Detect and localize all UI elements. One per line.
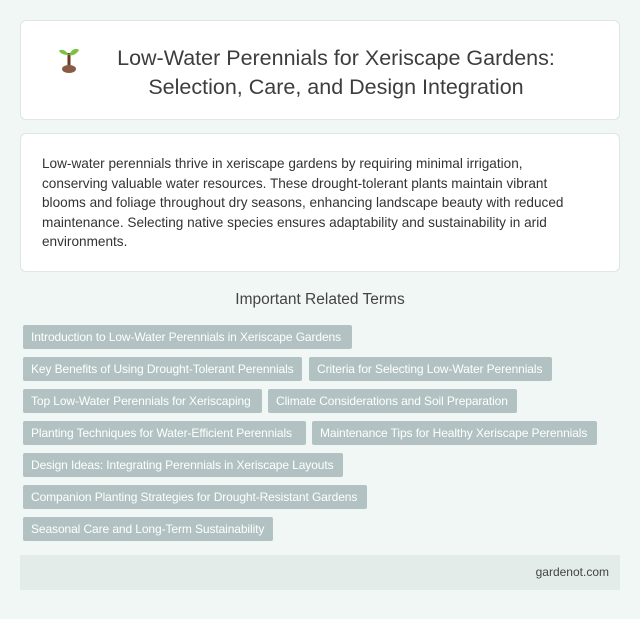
icon: seedling (59, 48, 79, 73)
tag 5 (268, 389, 517, 413)
tag 5: Climate Considerations and Soil Preparation (276, 394, 508, 408)
tag 3 (309, 357, 552, 381)
tag 6 (23, 421, 306, 445)
tag 9: Companion Planting Strategies for Drought-Resistant Gardens (31, 490, 357, 504)
description card (20, 133, 620, 272)
tag 2 (23, 357, 302, 381)
tag 1 (23, 325, 352, 349)
tag 6: Planting Techniques for Water-Efficient Perennials (31, 426, 292, 440)
tag 2: Key Benefits of Using Drought-Tolerant Perennials (31, 362, 294, 376)
tag 7 (312, 421, 597, 445)
footer text: gardenot.com (536, 565, 609, 579)
tag 3: Criteria for Selecting Low-Water Perennials (317, 362, 542, 376)
tag 8: Design Ideas: Integrating Perennials in Xeriscape Layouts (31, 458, 334, 472)
tag 10 (23, 517, 273, 541)
title: Low-Water Perennials for Xeriscape Gardens: Selection, Care, and Design Integration (117, 46, 555, 99)
tag 4 (23, 389, 262, 413)
related terms heading: Important Related Terms (235, 291, 405, 308)
header card (20, 20, 620, 120)
tag 1: Introduction to Low-Water Perennials in Xeriscape Gardens (31, 330, 341, 344)
description text: Low-water perennials thrive in xeriscape gardens by requiring minimal irrigation, conserving valuable water resources. These drought-tolerant plants maintain vibrant blooms and foliage throughout dry seasons, enhancing landscape beauty with reduced maintenance. Selecting native species ensures adaptability and sustainability in arid environments. (42, 156, 563, 249)
tag 10: Seasonal Care and Long-Term Sustainability (31, 522, 264, 536)
tag 4: Top Low-Water Perennials for Xeriscaping (31, 394, 251, 408)
footer (20, 555, 620, 590)
tag 9 (23, 485, 367, 509)
tag 7: Maintenance Tips for Healthy Xeriscape Perennials (320, 426, 587, 440)
tag 8 (23, 453, 343, 477)
